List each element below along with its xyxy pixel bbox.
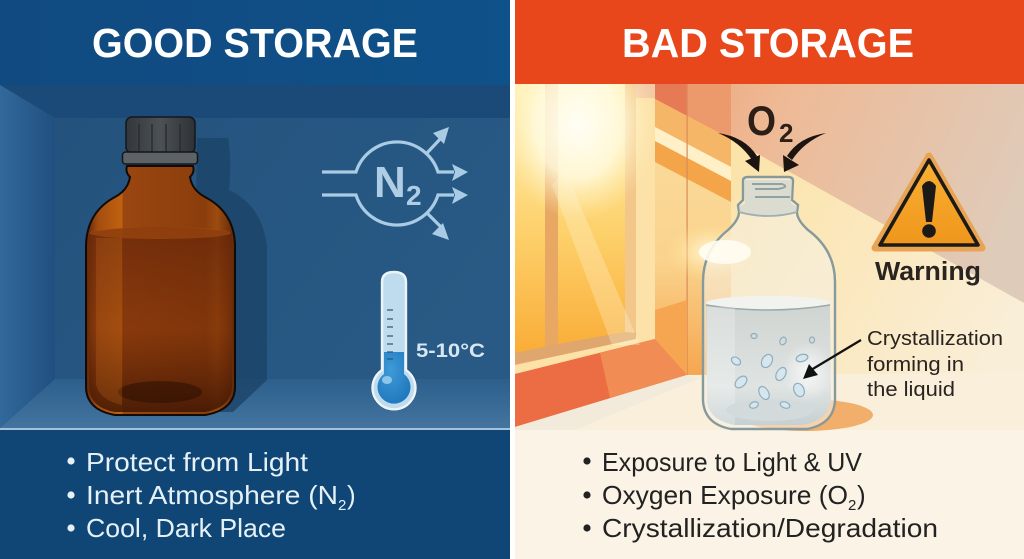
footer panel: good storage bullets: Cool, Dark Place <box>86 513 286 543</box>
footer panel: good storage bullets: 2 <box>338 497 346 514</box>
sunlit room background <box>515 84 1024 430</box>
windowsill floor <box>515 374 948 430</box>
amber bottle <box>86 117 235 415</box>
footer panel: good storage bullets: ) <box>347 480 356 510</box>
footer panel: bad storage bullets: ) <box>857 480 866 510</box>
label: O2 <box>747 97 793 148</box>
glare on glass <box>699 240 751 264</box>
orange wall below window <box>515 300 687 427</box>
footer panel: good storage bullets <box>0 430 510 559</box>
clear glass bottle <box>699 177 835 429</box>
callout arrow <box>803 340 861 379</box>
neck ring highlight <box>739 212 797 216</box>
icon: warning triangle <box>875 156 982 248</box>
callout text: the liquid <box>867 379 955 401</box>
label: N2: N <box>374 158 406 207</box>
bottle cap <box>122 117 198 164</box>
label: N2: 2 <box>406 180 422 211</box>
bottle glow on surface <box>737 399 873 431</box>
footer panel: bad storage bullets: Exposure to Light & UV <box>602 447 863 477</box>
footer panel: good storage bullets: Inert Atmosphere (N <box>86 480 338 510</box>
panel: good storage <box>0 0 510 559</box>
bottle body <box>86 166 235 415</box>
cabinet: shelf interior <box>0 85 510 430</box>
amber liquid <box>89 227 232 412</box>
callout text <box>867 328 1003 401</box>
neck threads <box>752 184 790 197</box>
outlet arrows <box>427 127 468 240</box>
liquid <box>706 298 831 425</box>
heading: bad storage: BAD STORAGE <box>622 20 914 66</box>
callout text: Crystallization <box>867 328 1003 350</box>
glass body <box>703 177 835 429</box>
heading: good storage: GOOD STORAGE <box>92 20 418 66</box>
callout text: forming in <box>867 354 964 376</box>
sun beam on wall <box>731 140 1024 374</box>
icon: nitrogen gas <box>322 127 468 240</box>
glass neck tint <box>739 180 797 217</box>
panel: bad storage <box>500 0 1024 559</box>
label: warning: Warning <box>875 258 981 286</box>
callout: crystallization <box>803 328 1003 401</box>
gas molecule ring with inlets and outlets <box>322 142 454 225</box>
label: temperature: 5-10°C <box>416 340 485 362</box>
header bar: bad storage <box>515 0 1024 84</box>
label: O2: 2 <box>779 118 793 148</box>
window <box>515 84 655 374</box>
divider <box>510 0 515 559</box>
footer panel: bad storage bullets: 2 <box>848 497 856 514</box>
footer panel: bad storage bullets: Crystallization/Degradation <box>602 513 938 543</box>
wall corner and light bands <box>655 84 731 375</box>
sediment <box>726 399 814 421</box>
white glow near arrow <box>782 342 834 402</box>
sun glare <box>515 84 644 214</box>
label: N2 <box>374 158 422 211</box>
crystals <box>730 334 814 410</box>
label: O2: O <box>747 97 776 144</box>
bottle shadow <box>150 138 267 412</box>
footer panel: good storage bullets: Protect from Light <box>86 447 309 477</box>
icon: thermometer <box>372 272 415 409</box>
header bar: good storage <box>0 0 510 85</box>
footer panel: bad storage bullets: Oxygen Exposure (O <box>602 480 848 510</box>
arrows: oxygen entering bottle <box>718 133 826 172</box>
footer panel: bad storage bullets <box>515 430 1024 559</box>
